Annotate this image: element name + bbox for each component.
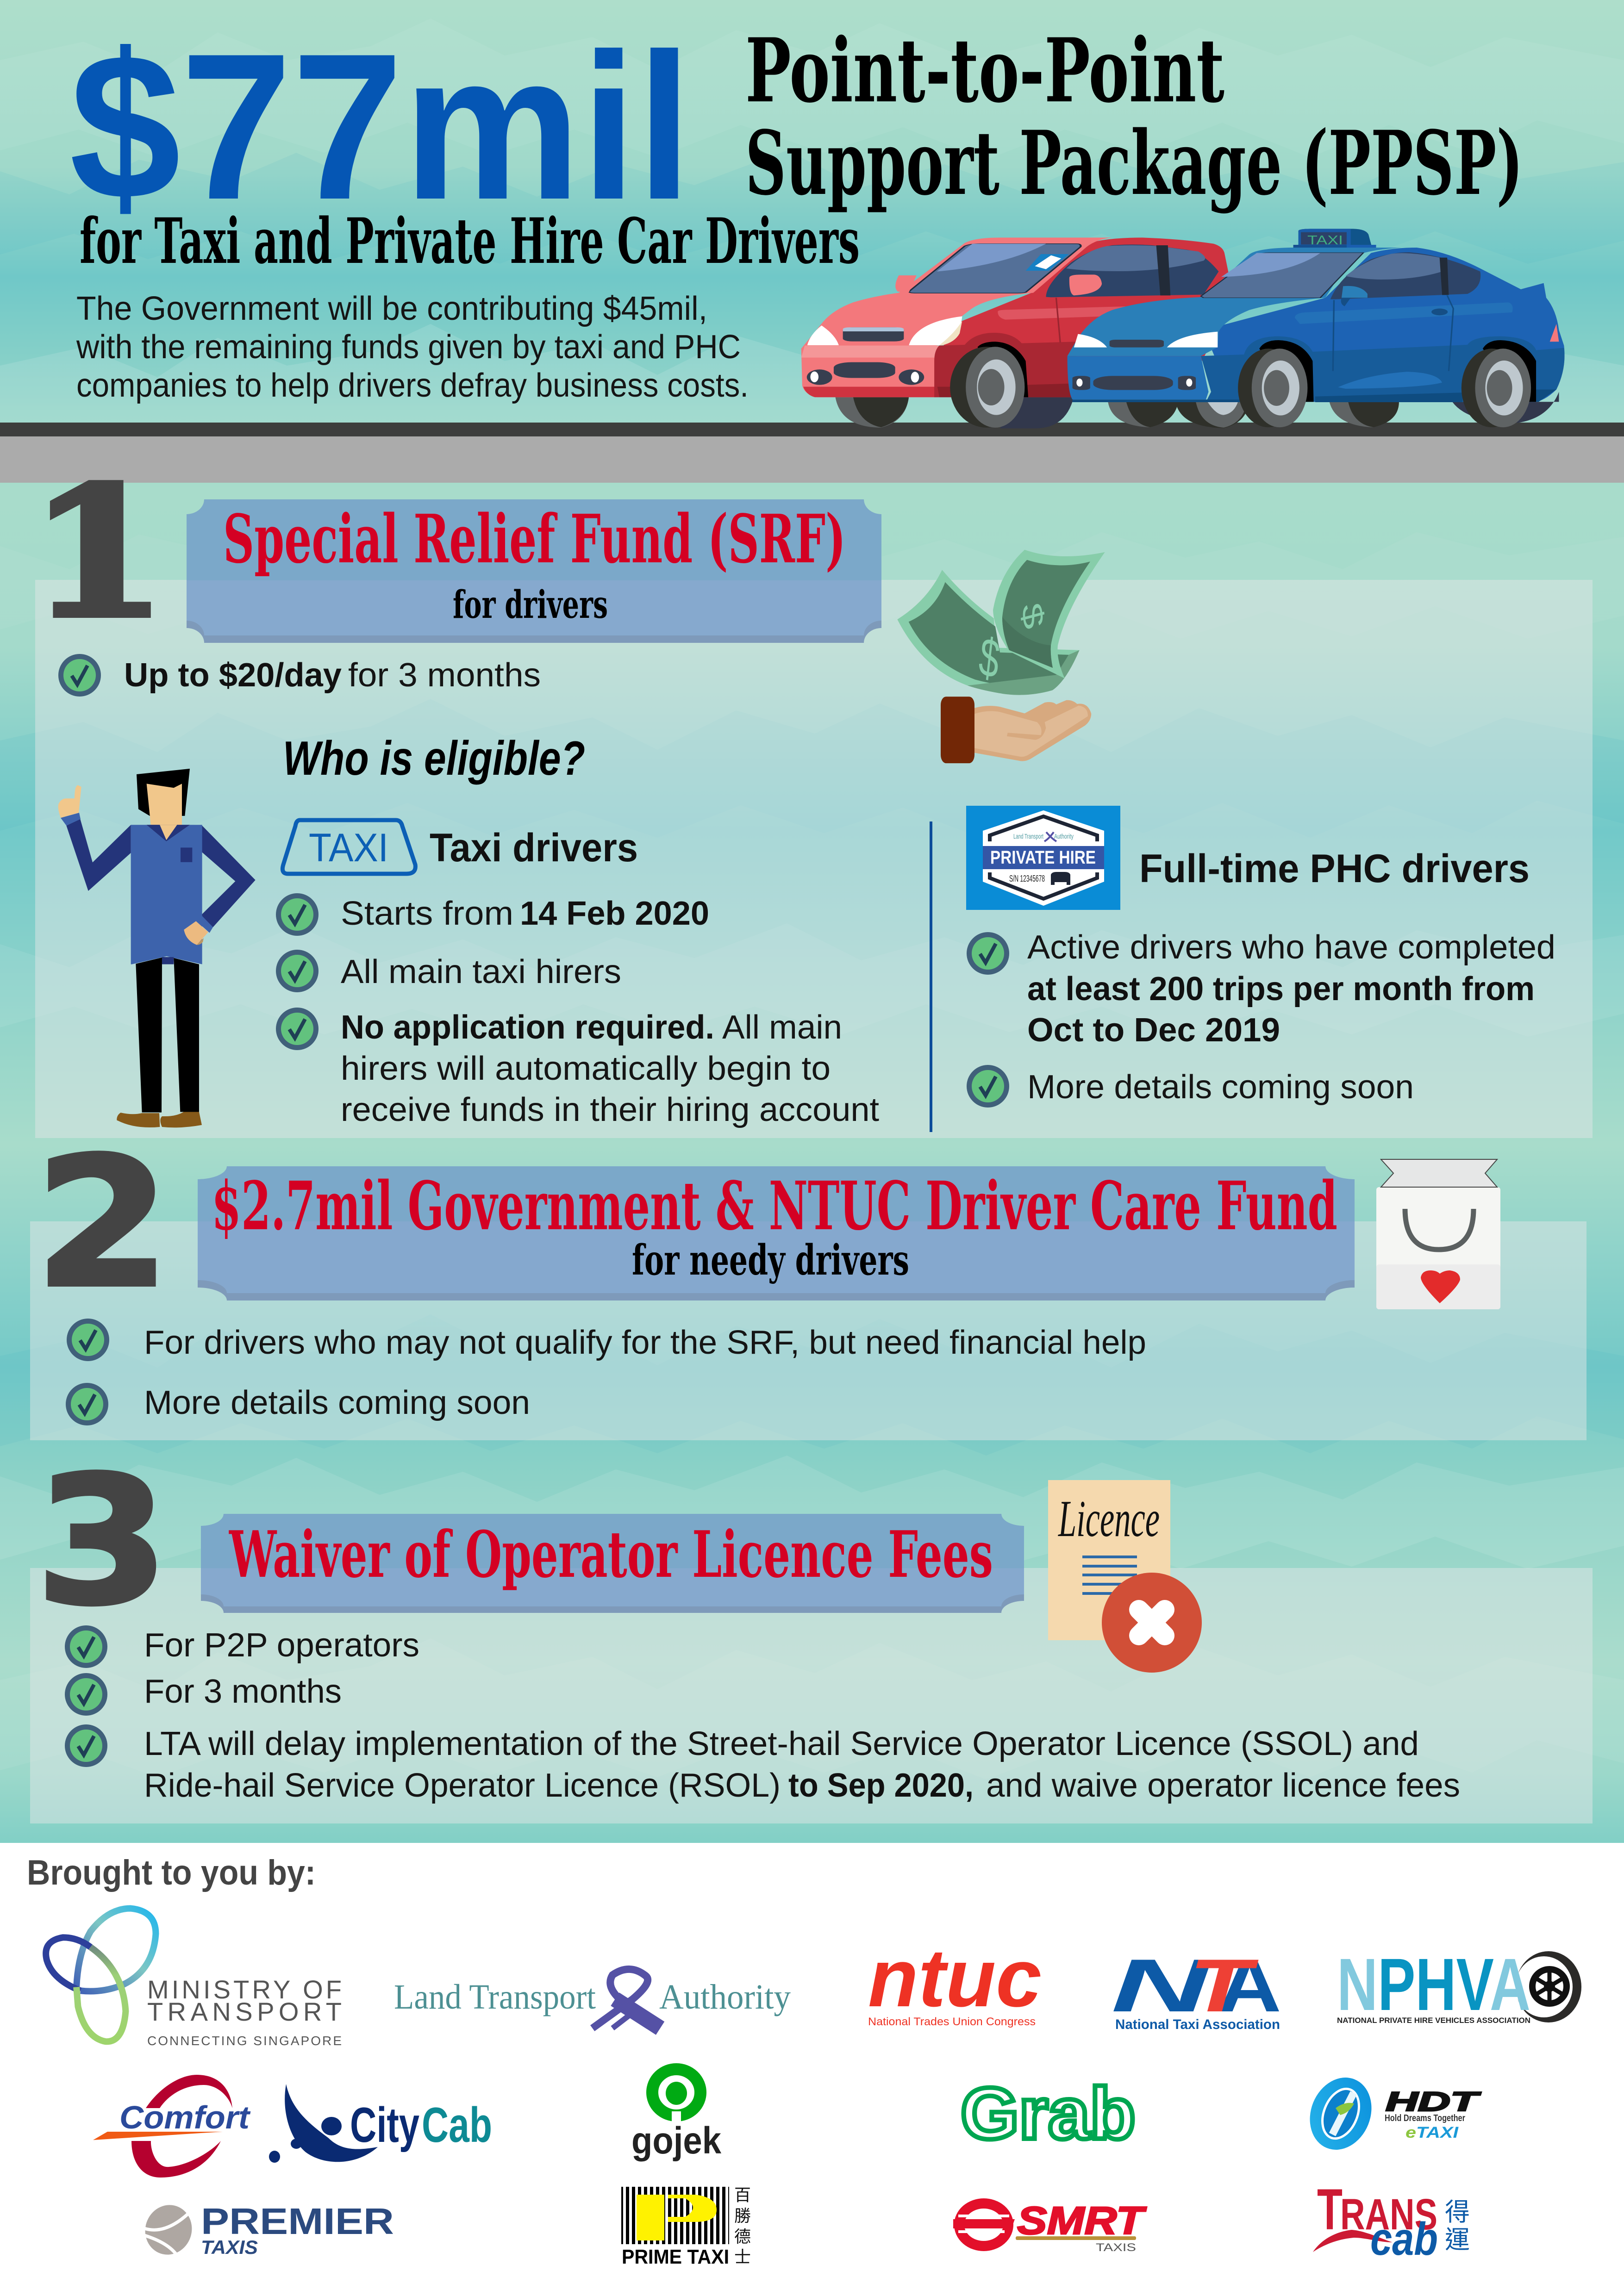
bullet: active drivers: at least 200 trips per month from [1027,971,1535,1008]
ribbon heading: waiver: Waiver of Operator Licence Fees [229,1517,993,1592]
logo: ntuc: National Trades Union Congress [868,2016,1036,2028]
logo: smrt taxis: SMRT [1017,2199,1147,2242]
icon: private hire decal: PRIVATE HIRE [990,847,1096,868]
illustration: driver [58,769,256,1127]
logo: trans cab: 運 [1445,2226,1470,2254]
logo: premier taxis [139,2199,394,2261]
numeral 1: 1 [29,448,168,657]
logo: prime taxi: 勝 [734,2206,751,2225]
panel: footer [0,1843,1624,2296]
bullet: active drivers: Oct to Dec 2019 [1027,1012,1280,1049]
ribbon heading: SRF: for drivers [453,583,608,627]
bullet: P2P operators: For P2P operators [144,1627,419,1664]
red car [801,237,1234,429]
logo: smrt taxis: TAXIS [1096,2241,1136,2254]
logo: prime taxi [621,2185,751,2268]
logo: gojek: gojek [631,2120,721,2162]
numeral 3: 3 [35,1438,169,1644]
subtitle: for Taxi and Private Hire Car Drivers [80,204,860,278]
logo: prime taxi: 百 [734,2185,751,2204]
icon: private hire decal: Authority [1054,833,1074,840]
bullet: all main taxi hirers: All main taxi hirers [341,953,621,990]
logo: land transport authority: Land Transport [394,1978,596,2016]
icon: licence with cross: Licence [1058,1490,1160,1548]
bullet: drivers who may not qualify: For drivers who may not qualify for the SRF, but need financial help [144,1324,1146,1361]
title line one: Point-to-Point [745,19,1224,122]
logo: trans cab: RANS [1340,2190,1437,2239]
bullet: more details coming soon: More details coming soon [144,1384,530,1421]
logo: hdt taxi: HDT [1386,2087,1481,2117]
bullet: LTA delay [65,1724,1460,1804]
icon: gift bag with heart [1376,1159,1500,1309]
intro paragraph [76,290,749,404]
icon: taxi sign: TAXI [309,826,388,870]
illustration: cars [801,229,1565,429]
logo: smrt taxis [953,2199,1147,2254]
ribbon heading: driver care fund [198,1166,1355,1300]
logo: trans cab: cab [1370,2213,1438,2265]
icon: private hire decal: Land Transport [1013,833,1044,840]
icon: money falling into hand: $ [1015,599,1050,633]
bullet: up to $20/day: for 3 months [348,657,541,694]
bullet: no application required: All main [722,1009,842,1046]
logo: trans cab: 得 [1445,2198,1470,2226]
logo: national taxi association [1111,1944,1281,2032]
logo: national taxi association: N [1111,1944,1212,2028]
logo: national taxi association: National Taxi Association [1115,2017,1280,2032]
road [0,423,1624,483]
logo: premier taxis: PREMIER [201,2201,394,2242]
heading: full-time PHC drivers: Full-time PHC drivers [1139,846,1530,891]
icon: private hire decal [966,806,1120,910]
logo: comfort transport [93,2075,251,2178]
logo: prime taxi: 士 [734,2247,751,2266]
ribbon heading: driver care fund: for needy drivers [632,1236,909,1285]
bullet: LTA delay: to Sep 2020, [788,1767,974,1804]
ribbon heading: waiver [201,1514,1024,1613]
heading: taxi drivers: Taxi drivers [430,826,638,870]
taxi roof sign text: TAXI [1307,233,1343,247]
bullet: no application required: No application required. [341,1009,714,1046]
bullet: no application required: receive funds in their hiring account [341,1091,879,1128]
logo: prime taxi: 德 [734,2227,751,2246]
logo: grab: Grab [961,2073,1136,2154]
logo: citycab: City [350,2097,419,2153]
bullet: LTA delay: Ride-hail Service Operator Licence (RSOL) [144,1767,781,1804]
bullet: up to $20/day: Up to $20/day [124,657,342,694]
logo: national taxi association: A [1218,1944,1281,2028]
intro paragraph: companies to help drivers defray business costs. [76,367,749,404]
bullet: starts from: Starts from [341,895,513,932]
icon: private hire decal: S/N 12345678 [1009,874,1045,884]
panel: section 2 [30,1221,1587,1440]
logo: premier taxis: TAXIS [201,2236,258,2258]
logo: citycab [269,2084,492,2163]
icon: taxi sign [282,820,415,874]
logo: hdt taxi [1299,2068,1481,2159]
logo: nphva: NPHVA [1337,1943,1530,2026]
logo: ntuc: ntuc [868,1932,1042,2024]
bullet: no application required [276,1008,879,1128]
heading: brought to you by: Brought to you by: [27,1853,316,1892]
logo: nphva: NATIONAL PRIVATE HIRE VEHICLES ASSOCIATION [1337,2016,1530,2025]
heading: who is eligible: Who is eligible? [283,732,585,785]
logo: hdt taxi: Hold Dreams Together [1385,2113,1465,2123]
bullet: starts from: 14 Feb 2020 [520,895,709,932]
logo: ministry of transport: CONNECTING SINGAPORE [147,2034,342,2048]
logo: ministry of transport: MINISTRY OF [147,1975,342,2004]
panel: section 1 [35,580,1593,1138]
bullet: starts from [276,893,709,936]
bullet: no application required: hirers will automatically begin to [341,1050,831,1087]
bullet: all main taxi hirers [276,950,621,992]
ribbon heading: SRF: Special Relief Fund (SRF) [223,500,846,578]
logo: prime taxi: PRIME TAXI [622,2246,729,2268]
intro paragraph: with the remaining funds given by taxi and PHC [76,329,741,366]
blue taxi [1068,229,1565,428]
bullet: P2P operators [65,1625,419,1668]
logo: citycab: Cab [422,2097,492,2153]
logo: ministry of transport: TRANSPORT [147,1997,342,2026]
bullet: active drivers: Active drivers who have completed [1027,929,1555,966]
bullet: 3 months [65,1673,342,1716]
logo: trans cab: T [1317,2178,1343,2242]
logo: ministry of transport [46,1909,342,2048]
numeral 2: 2 [34,1120,171,1327]
icon: licence with cross [1048,1480,1202,1673]
bullet: up to $20/day [58,654,541,697]
panel: section 3 [30,1568,1593,1823]
bullet: LTA delay: LTA will delay implementation of the Street-hail Service Operator Licence (SSOL) and [144,1725,1419,1762]
ribbon heading: SRF [187,499,881,643]
logo: land transport authority: Authority [659,1978,791,2016]
icon: money falling into hand [897,550,1105,763]
intro paragraph: The Government will be contributing $45mil, [76,290,707,327]
bullet: 3 months: For 3 months [144,1673,342,1710]
logo: hdt taxi: eTAXI [1405,2124,1459,2141]
bullet: LTA delay: and waive operator licence fees [986,1767,1460,1804]
logo: national taxi association: T [1189,1944,1259,2028]
logo: land transport authority [394,1969,791,2028]
logo: trans cab [1313,2178,1470,2265]
headline: $77mil: $77mil [69,11,692,243]
icon: money falling into hand: $ [976,626,1003,691]
bullet: active drivers [967,929,1555,1049]
logo: gojek [631,2069,721,2162]
bullet: more details: More details coming soon [1027,1069,1414,1106]
logo: comfort transport: Comfort [119,2099,251,2135]
